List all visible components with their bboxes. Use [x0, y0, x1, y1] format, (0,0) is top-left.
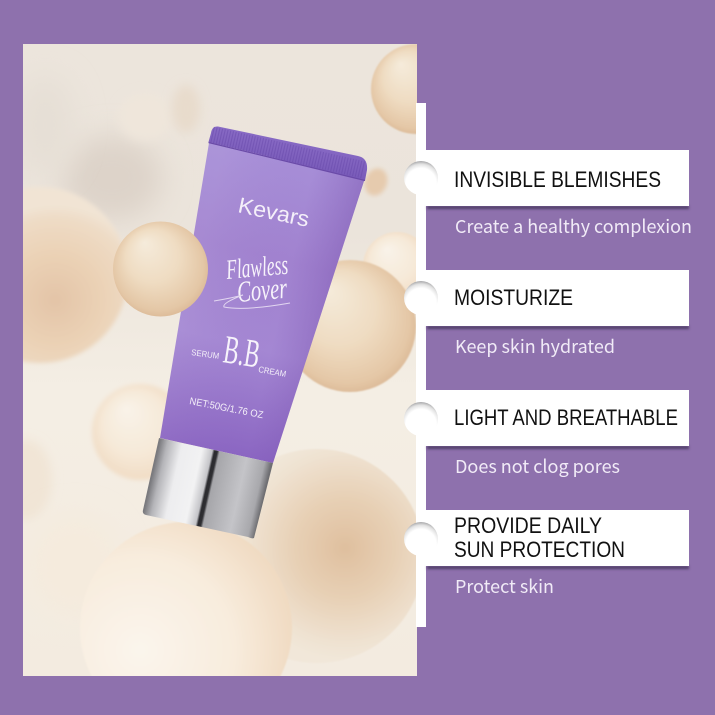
feature: invisible blemishes: [404, 150, 692, 239]
feature: light and breathable: Does not clog pores: [455, 453, 620, 479]
feature: light and breathable: LIGHT AND BREATHABLE: [454, 405, 678, 430]
feature: light and breathable: [404, 390, 689, 479]
feature: moisturize: [404, 270, 689, 359]
foreground sphere: [113, 222, 208, 316]
tube body: [160, 143, 365, 463]
metallic cap: [143, 438, 273, 538]
photo panel with floating spheres: [23, 44, 417, 676]
product tube: [143, 126, 367, 538]
product type: SERUM: [191, 347, 220, 361]
feature: daily sun protection: SUN PROTECTION: [454, 537, 625, 562]
product type: B.B: [221, 326, 263, 377]
feature: daily sun protection: [404, 510, 689, 599]
script title: Cover: [236, 272, 289, 309]
feature: daily sun protection: Protect skin: [455, 573, 554, 599]
product type: CREAM: [258, 364, 287, 379]
script title: [214, 250, 290, 309]
feature: moisturize: Keep skin hydrated: [455, 333, 615, 359]
net weight: NET:50G/1.76 OZ: [188, 396, 264, 421]
brand name: Kevars: [236, 192, 312, 232]
feature: daily sun protection: PROVIDE DAILY: [454, 513, 602, 538]
product type: [191, 326, 287, 379]
script title: Flawless: [224, 250, 289, 286]
tube crimp: [208, 126, 367, 180]
feature: moisturize: MOISTURIZE: [454, 285, 573, 310]
white vertical strip: [416, 103, 426, 627]
feature: invisible blemishes: INVISIBLE BLEMISHES: [454, 167, 661, 192]
feature: invisible blemishes: Create a healthy complexion: [455, 213, 692, 239]
